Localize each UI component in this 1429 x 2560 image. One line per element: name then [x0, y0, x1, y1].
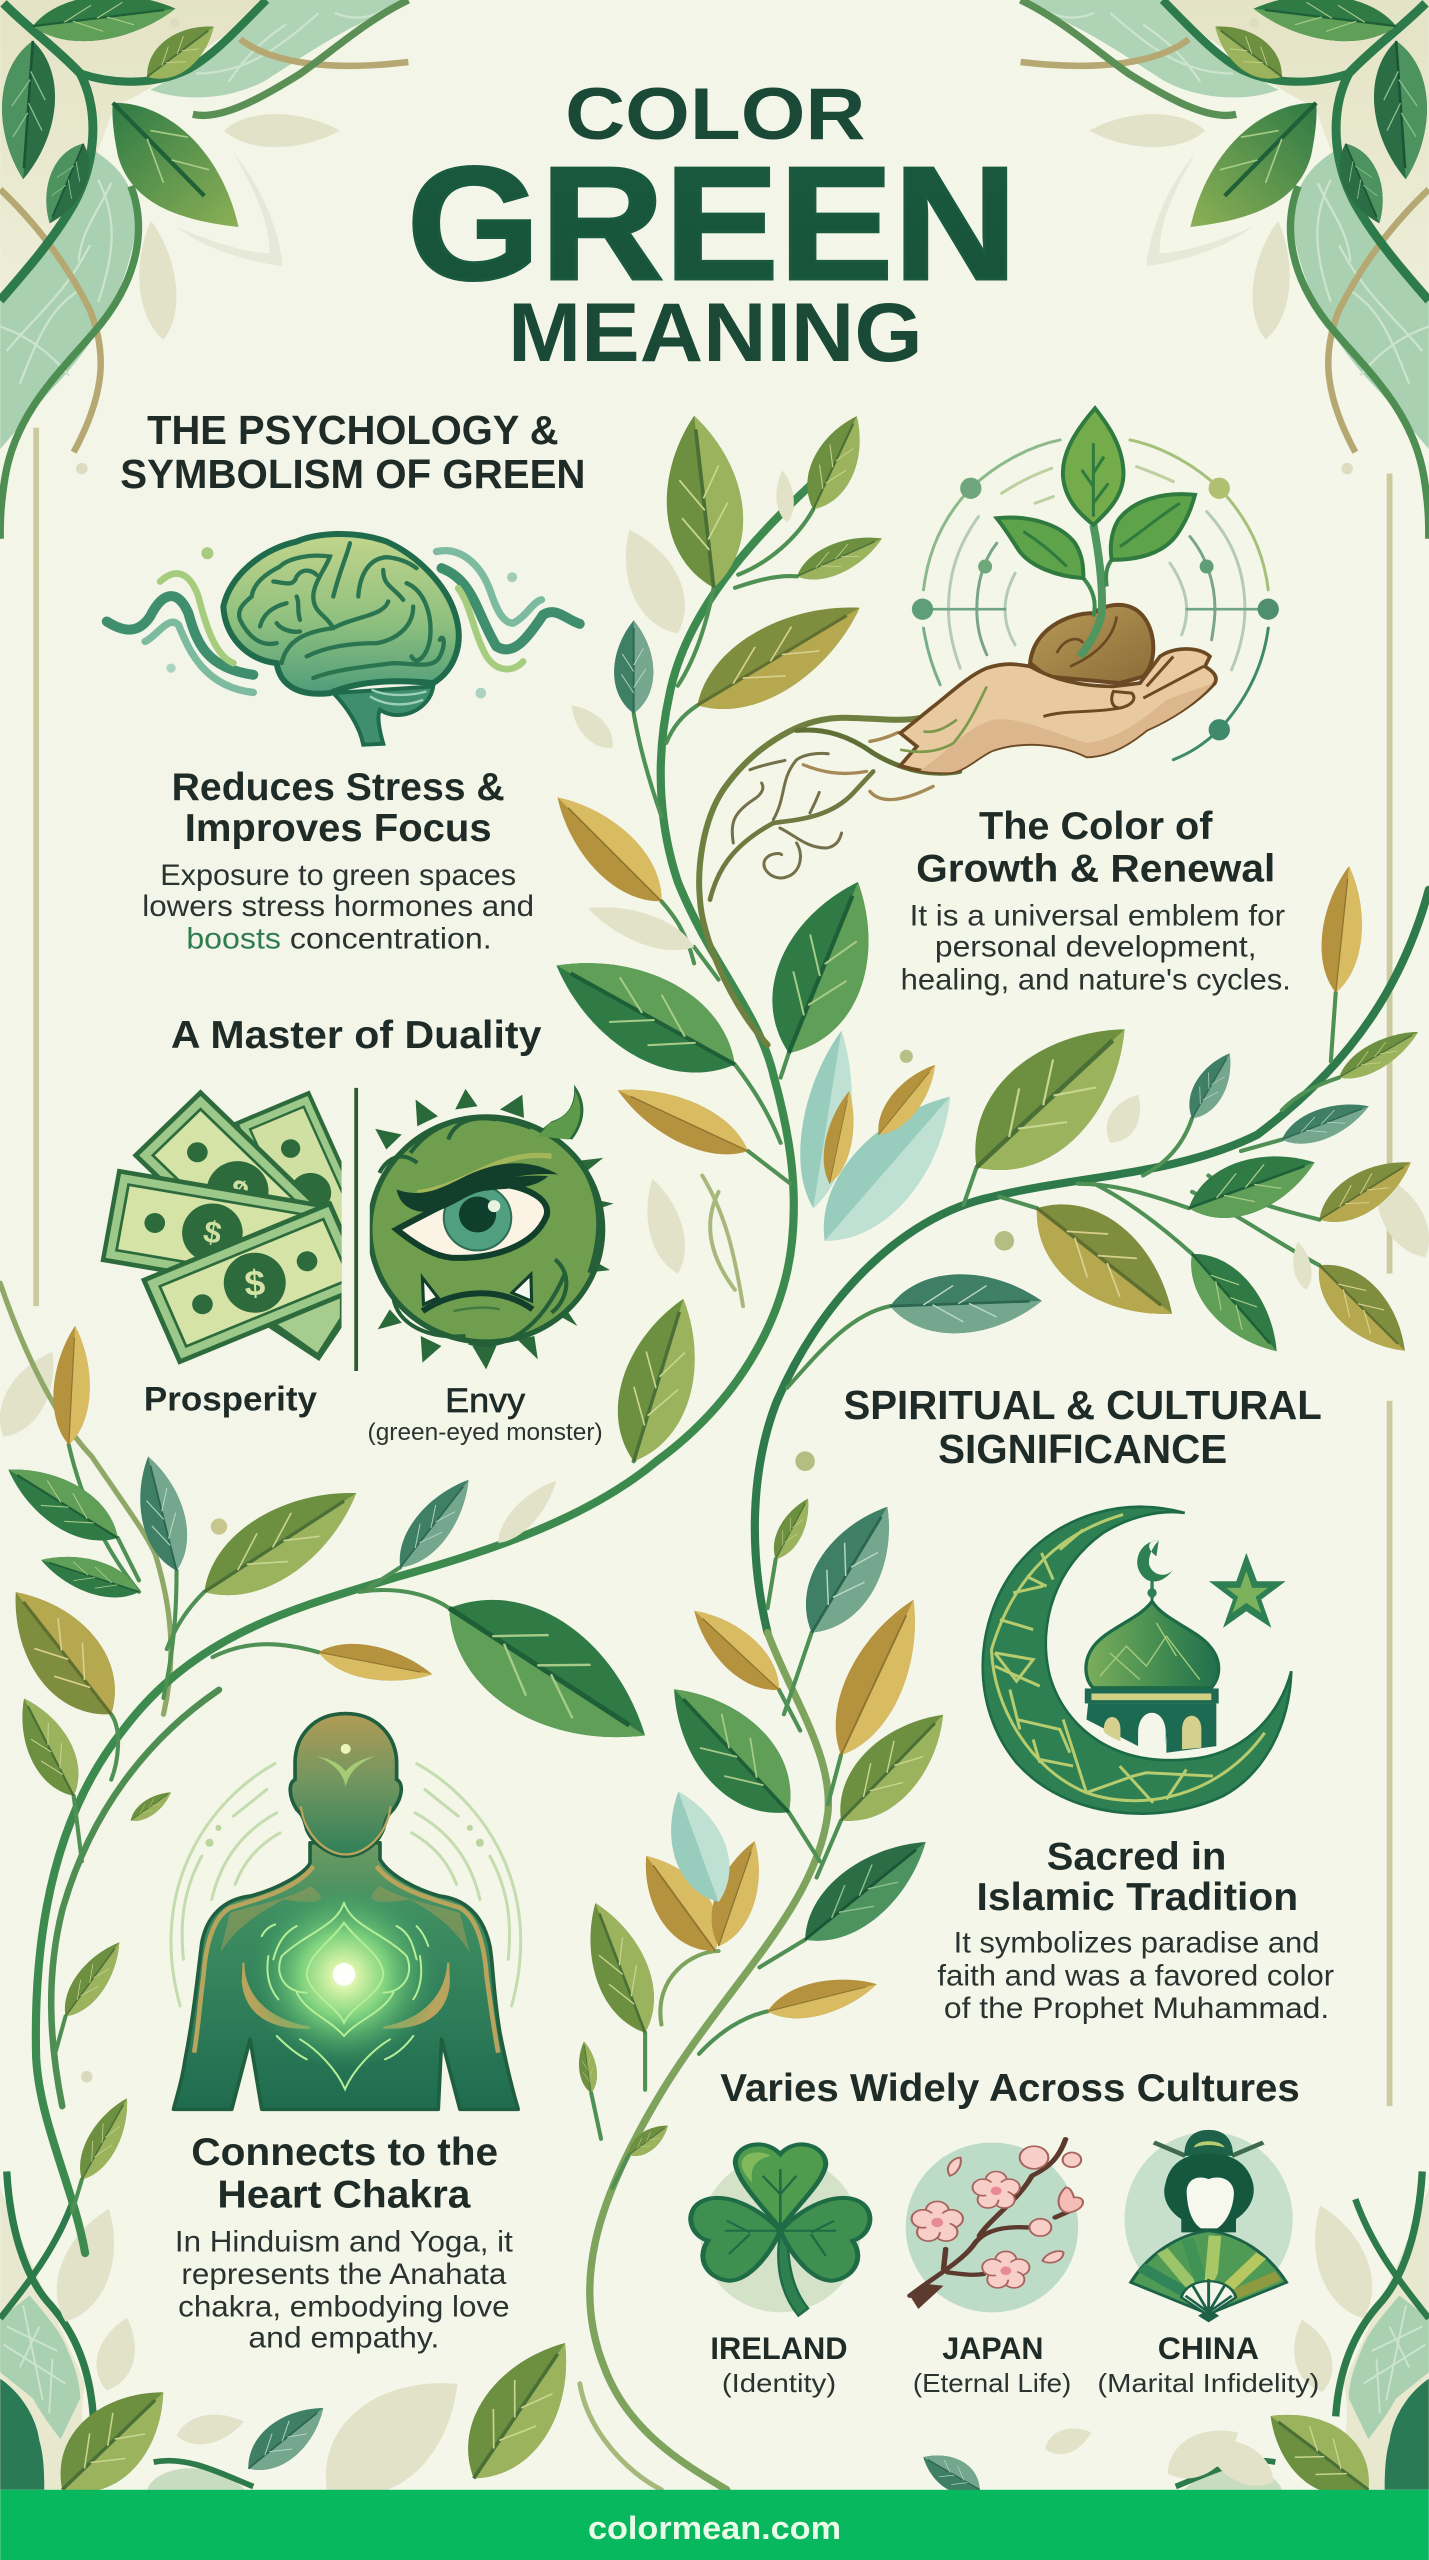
heading: sacred in islamic tradition: Islamic Tradition: [977, 1876, 1298, 1919]
monster: [370, 1085, 614, 1369]
title: COLOR: [565, 72, 866, 155]
text: growth body: personal development,: [935, 931, 1257, 964]
head: [290, 1714, 401, 1856]
heading: psychology and symbolism: SYMBOLISM OF GREEN: [120, 451, 586, 497]
heading: reduces stress: Reduces Stress &: [172, 766, 505, 809]
text: islamic body: [937, 1927, 1334, 2025]
heading: master of duality: A Master of Duality: [171, 1014, 542, 1057]
text: reduces stress body: boosts concentration.: [186, 923, 492, 956]
text: islamic body: faith and was a favored color: [937, 1959, 1334, 1992]
culture icons: [691, 2130, 1293, 2322]
text: islamic body: of the Prophet Muhammad.: [944, 1992, 1329, 2025]
hand: [900, 649, 1216, 772]
labels: culture names: (Identity): [722, 2368, 836, 2398]
text: growth body: [901, 900, 1291, 996]
text: heart chakra body: and empathy.: [248, 2322, 439, 2355]
heading: psychology and symbolism: [120, 407, 586, 497]
heading: the color of growth: [916, 805, 1275, 891]
star: [1209, 1553, 1286, 1628]
heart chakra glow: [249, 1883, 439, 2069]
heading: sacred in islamic tradition: [977, 1835, 1298, 1919]
vine leaves: lower left: [0, 1325, 673, 2187]
text: reduces stress body: [142, 859, 534, 956]
heading: heart chakra: Connects to the: [191, 2131, 498, 2174]
heading: the color of growth: Growth & Renewal: [916, 848, 1275, 891]
text: growth body: It is a universal emblem for: [910, 900, 1285, 933]
side rule lines: [36, 428, 1390, 2106]
money: $: [243, 1262, 266, 1304]
text: heart chakra body: chakra, embodying love: [178, 2291, 510, 2324]
text: growth body: healing, and nature's cycles.: [901, 963, 1291, 996]
vine leaves: lower centre: [571, 1491, 964, 2163]
text: reduces stress body: lowers stress hormones and: [142, 890, 534, 923]
corner foliage: top right: [1021, 0, 1429, 539]
monster mouth: [422, 1293, 533, 1311]
mosque: [1085, 1541, 1219, 1754]
heading: sacred in islamic tradition: Sacred in: [1047, 1835, 1226, 1878]
heading: heart chakra: [191, 2131, 498, 2216]
icon: cherry blossom: [906, 2139, 1083, 2312]
roots from the wrist: [699, 718, 960, 1045]
corner foliage: top left: [0, 0, 408, 539]
divider: [354, 1088, 358, 1371]
seedling: [997, 408, 1195, 683]
text: heart chakra body: In Hinduism and Yoga, it: [175, 2225, 513, 2258]
aura arcs: [171, 1764, 521, 2006]
heading: spiritual and cultural: SPIRITUAL & CULTURAL: [843, 1382, 1322, 1428]
text: heart chakra body: [175, 2225, 513, 2355]
labels: prosperity and envy: Prosperity: [144, 1381, 317, 1419]
money: $: [220, 1172, 255, 1210]
vine leaves: bottom: [38, 2323, 1387, 2515]
vine leaves: top: [537, 407, 1425, 1471]
labels: prosperity and envy: Envy: [445, 1382, 526, 1420]
labels: culture names: (Marital Infidelity): [1097, 2368, 1319, 2398]
heading: varies across cultures: Varies Widely Across Cultures: [720, 2067, 1300, 2110]
labels: culture names: CHINA: [1158, 2331, 1259, 2366]
labels: culture names: JAPAN: [942, 2331, 1043, 2366]
gold and teal bud: [625, 1783, 773, 1966]
pale bottom leaves: [0, 1163, 1429, 2523]
title: [407, 72, 1017, 379]
text: heart chakra body: represents the Anahata: [181, 2258, 507, 2291]
heading: the color of growth: The Color of: [979, 805, 1213, 848]
heading: psychology and symbolism: THE PSYCHOLOGY &: [147, 407, 559, 453]
money: $: [201, 1214, 224, 1251]
title: GREEN: [407, 134, 1017, 314]
footer bar: colormean.com: [588, 2509, 841, 2546]
monster eye: [397, 1184, 547, 1258]
heading: heart chakra: Heart Chakra: [217, 2173, 472, 2216]
icon: shamrock: [691, 2144, 870, 2316]
heading: spiritual and cultural: SIGNIFICANCE: [938, 1426, 1227, 1472]
icon: seedling in hand: [900, 408, 1279, 772]
labels: prosperity and envy: (green-eyed monster): [368, 1419, 603, 1446]
corner foliage: bottom left: [0, 2171, 253, 2490]
labels: culture names: IRELAND: [710, 2331, 848, 2366]
money: [100, 1089, 342, 1365]
text: islamic body: It symbolizes paradise and: [954, 1927, 1319, 1960]
vine network: [0, 477, 1429, 2490]
labels: prosperity and envy: [144, 1381, 603, 1446]
title: MEANING: [508, 286, 923, 379]
icon: heart chakra figure: [171, 1714, 521, 2109]
corner foliage: bottom right: [1176, 2171, 1429, 2490]
labels: culture names: (Eternal Life): [913, 2368, 1071, 2398]
heading: reduces stress: [172, 766, 505, 850]
icon: money and monster: [100, 1085, 614, 1371]
orbit rings: [923, 440, 1268, 760]
icon: crescent and mosque: [983, 1507, 1291, 1814]
footer bar: [0, 2490, 1429, 2560]
text: reduces stress body: Exposure to green spaces: [160, 859, 516, 892]
icon: brain with waves: [107, 534, 580, 745]
heading: spiritual and cultural: [843, 1382, 1322, 1472]
heading: reduces stress: Improves Focus: [185, 807, 492, 850]
torso and arms: [173, 1843, 518, 2109]
icon: geisha with fan: [1124, 2130, 1293, 2322]
labels: culture names: [710, 2331, 1319, 2398]
